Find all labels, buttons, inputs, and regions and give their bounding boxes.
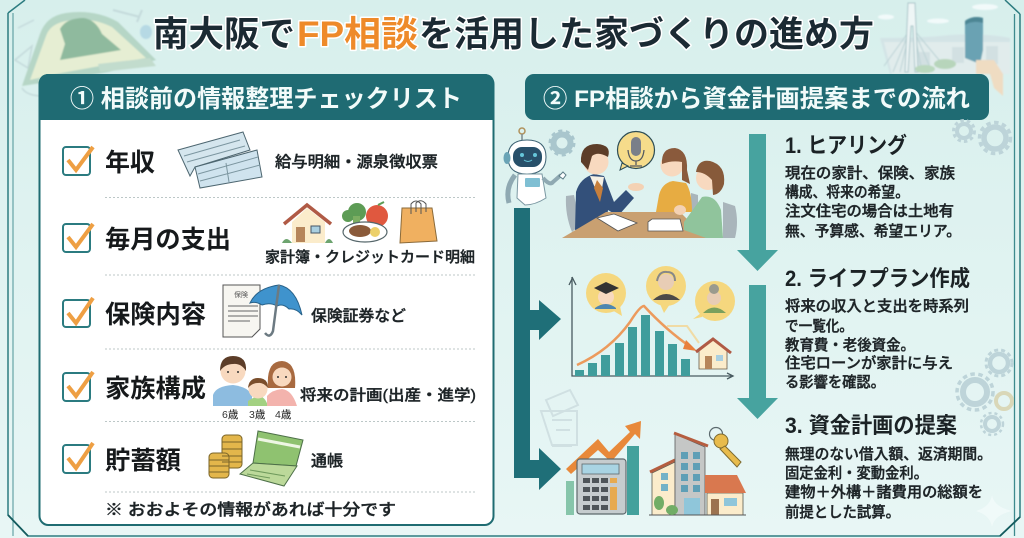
icon: elder woman bubble bbox=[693, 281, 735, 321]
illustration: bridge and city skyline bbox=[878, 3, 1010, 96]
title: FP相談 bbox=[297, 14, 418, 54]
step 1 text: 無、予算感、希望エリア。 bbox=[785, 222, 961, 240]
step 3 text: 無理のない借入額、返済期間。 bbox=[785, 446, 992, 463]
row: annual income: 給与明細・源泉徴収票 bbox=[275, 153, 438, 171]
icon: umbrella bbox=[250, 285, 302, 336]
icon: checkbox bbox=[63, 224, 93, 252]
icon: bankbook bbox=[240, 431, 303, 486]
decoration: sparkle bbox=[976, 495, 1012, 527]
step 1 text: 現在の家計、保険、家族 bbox=[785, 165, 955, 182]
icon: family bbox=[213, 356, 297, 406]
icon: key bbox=[710, 428, 741, 467]
step 3 text: 固定金利・変動金利。 bbox=[785, 465, 928, 482]
title: 南大阪で bbox=[153, 14, 295, 54]
title bbox=[153, 14, 874, 54]
icon: elder man bubble bbox=[646, 266, 686, 313]
row: annual income bbox=[63, 132, 438, 188]
illustration: consultation bbox=[562, 132, 737, 238]
icon: small gear bbox=[550, 131, 574, 155]
step 2 text: 教育費・老後資金。 bbox=[785, 337, 915, 354]
row: family: 4歳 bbox=[275, 408, 292, 421]
step 3 text: 建物＋外構＋諸費用の総額を bbox=[785, 483, 983, 501]
icon: coins bbox=[209, 435, 242, 478]
man in green bbox=[684, 197, 723, 238]
row: savings: 通帳 bbox=[311, 452, 343, 470]
icon: robot bbox=[504, 128, 566, 205]
icon: policy document: 保険 bbox=[234, 290, 248, 299]
arrow: step 2 to 3 bbox=[737, 285, 778, 419]
flow header bbox=[525, 74, 989, 120]
row: monthly expenses: 家計簿・クレジットカード明細 bbox=[265, 248, 475, 266]
icon: faded card cart bbox=[541, 390, 578, 446]
step 1 text: 構成、将来の希望。 bbox=[785, 183, 909, 201]
step 2 text: 2. ライフプラン作成 bbox=[785, 266, 970, 291]
panel: checklist bbox=[39, 74, 494, 525]
table bbox=[562, 212, 706, 238]
icon: checkbox bbox=[63, 443, 93, 473]
icon: checkbox bbox=[63, 372, 93, 401]
step 3 text: 前提とした試算。 bbox=[785, 503, 900, 521]
icon: chart house bbox=[696, 339, 731, 369]
flow header: ② FP相談から資金計画提案までの流れ bbox=[543, 85, 970, 113]
icon: checkbox bbox=[63, 298, 93, 327]
panel card bbox=[40, 75, 494, 525]
row: family: 6歳 bbox=[222, 408, 239, 421]
row: family: 家族構成 bbox=[105, 375, 206, 403]
bracket arrow bbox=[514, 208, 561, 490]
chairs bbox=[566, 195, 580, 232]
row: family: 3歳 bbox=[249, 408, 266, 421]
illustration: calculator and graph bbox=[566, 421, 641, 515]
arrow: step 1 to 2 bbox=[737, 134, 778, 271]
advisor bbox=[575, 174, 634, 230]
title: を活用した家づくりの進め方 bbox=[419, 14, 874, 54]
panel: flow bbox=[504, 74, 992, 521]
illustration: houses and key bbox=[649, 428, 746, 515]
icon: house bbox=[282, 205, 333, 243]
step 2 text: 住宅ローンが家計に与え bbox=[785, 354, 953, 372]
note: ※ おおよその情報があれば十分です bbox=[105, 500, 396, 519]
icon: pay slips bbox=[178, 132, 262, 188]
panel header bbox=[39, 74, 494, 120]
papers on table bbox=[597, 214, 637, 231]
row: family bbox=[63, 356, 476, 421]
panel header: ① 相談前の情報整理チェックリスト bbox=[70, 85, 462, 113]
woman bbox=[656, 181, 692, 212]
icon: checkbox bbox=[63, 147, 93, 175]
row: savings bbox=[63, 431, 343, 486]
icon: lower right gears bbox=[957, 350, 1012, 435]
icon: shopping bag bbox=[400, 201, 437, 243]
row: insurance bbox=[63, 285, 406, 337]
step 2 text: る影響を確認。 bbox=[785, 373, 885, 391]
icon: food plate bbox=[342, 202, 388, 242]
step 1 text: 1. ヒアリング bbox=[785, 133, 907, 158]
icon: top right gears bbox=[954, 120, 1010, 154]
row: annual income: 年収 bbox=[105, 149, 155, 177]
icon: student bubble bbox=[586, 273, 626, 316]
chart: life plan bbox=[569, 277, 733, 379]
step 1 text: 注文住宅の場合は土地有 bbox=[785, 203, 954, 220]
row: monthly expenses bbox=[63, 201, 475, 266]
row: insurance: 保険内容 bbox=[105, 301, 206, 329]
row: savings: 貯蓄額 bbox=[105, 447, 181, 475]
step 1 text bbox=[785, 133, 961, 240]
step 3 text: 3. 資金計画の提案 bbox=[785, 413, 957, 438]
step 2 text: で一覧化。 bbox=[785, 318, 853, 335]
icon: policy document bbox=[223, 285, 260, 337]
row: monthly expenses: 毎月の支出 bbox=[105, 226, 231, 254]
step 2 text: 将来の収入と支出を時系列 bbox=[785, 298, 969, 315]
speech bubble with microphone bbox=[618, 132, 654, 170]
illustration: kofun burial mound bbox=[15, 10, 156, 96]
step 3 text bbox=[785, 413, 992, 521]
step 2 text bbox=[785, 266, 970, 391]
row: family: 将来の計画(出産・進学) bbox=[300, 387, 476, 404]
row: insurance: 保険証券など bbox=[311, 307, 406, 325]
